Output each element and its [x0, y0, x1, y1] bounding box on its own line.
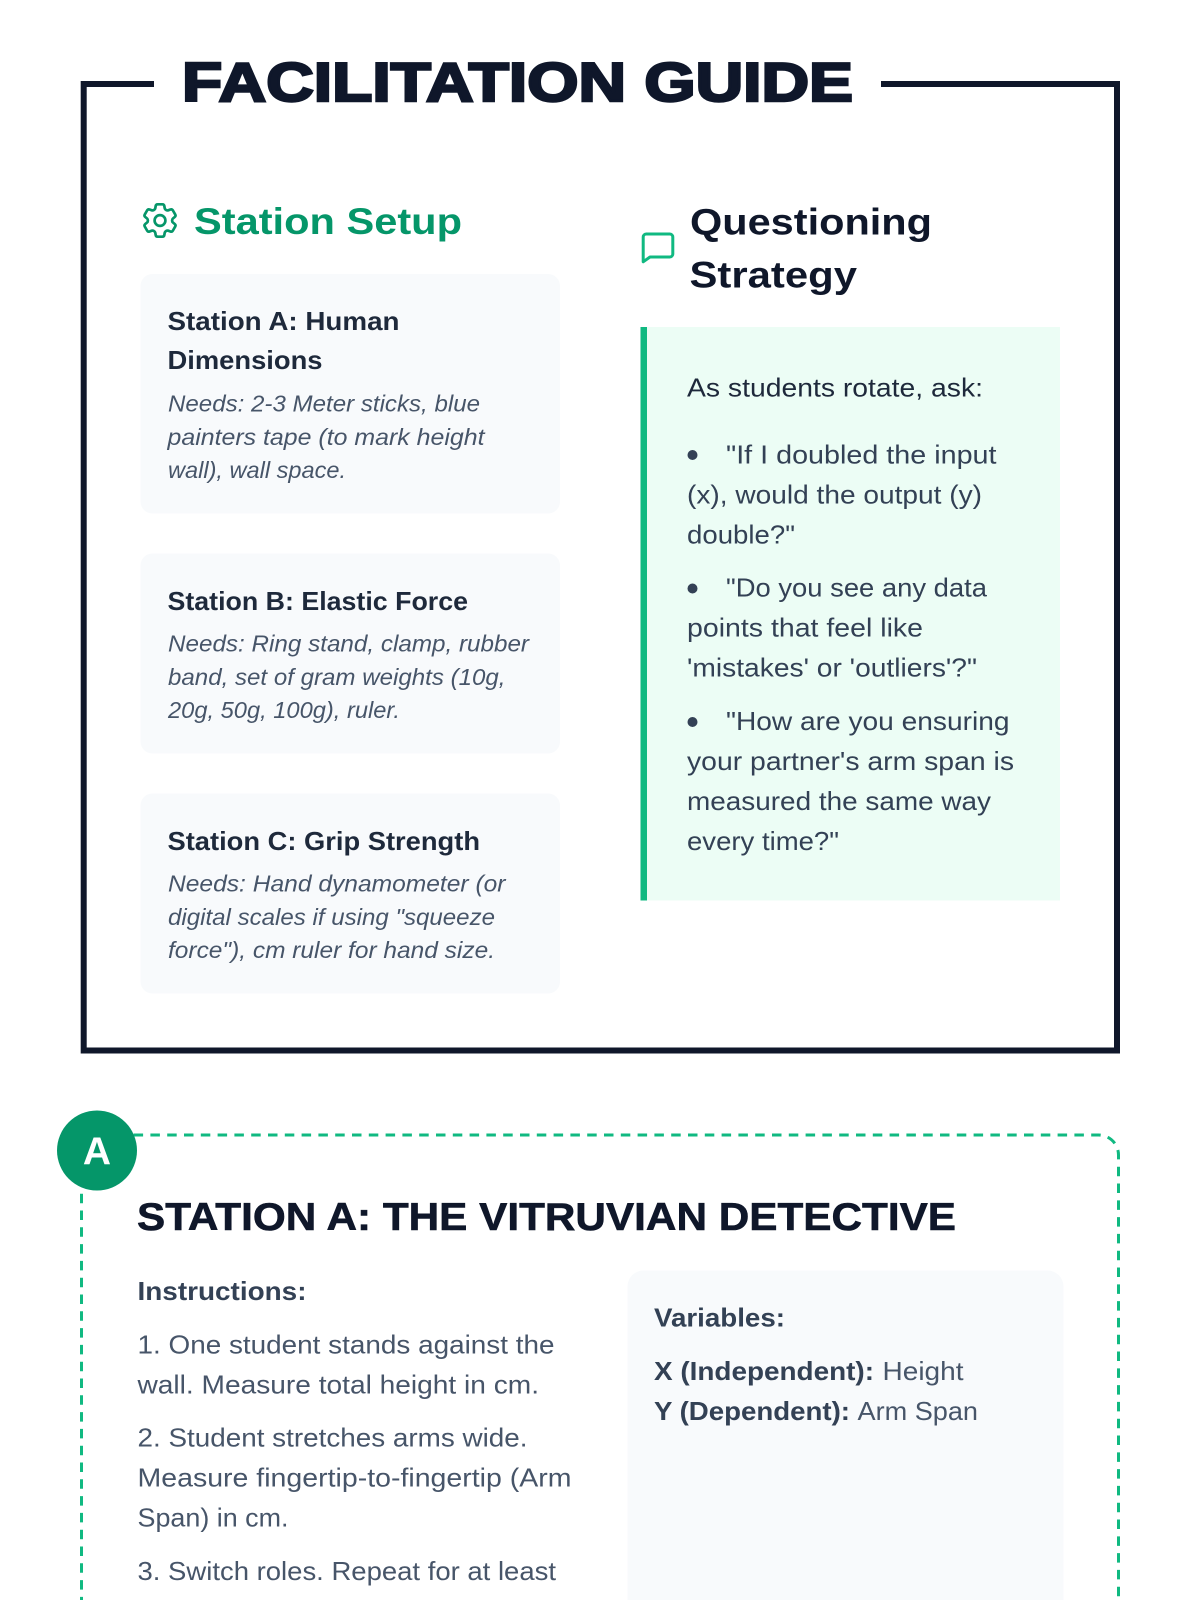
- card: station B: 20g, 50g, 100g), ruler.: [167, 697, 400, 723]
- question 2: 'mistakes' or 'outliers'?": [687, 652, 977, 682]
- card: station B: band, set of gram weights (10g,: [168, 664, 506, 690]
- card: station B: Needs: Ring stand, clamp, rubber: [168, 630, 530, 656]
- question 3: "How are you ensuring: [726, 706, 1010, 736]
- card: station A: painters tape (to mark height: [166, 424, 486, 450]
- question 1: double?": [687, 520, 795, 550]
- column: station setup: [140, 201, 560, 994]
- question 3: every time?": [687, 826, 839, 856]
- instructions: Span) in cm.: [138, 1502, 288, 1532]
- panel: station A vitruvian detective: [57, 1110, 1118, 1600]
- panel: facilitation guide: [84, 51, 1117, 1050]
- card: station B: [140, 554, 560, 754]
- card: station A: wall), wall space.: [168, 457, 346, 483]
- panel: variables: Variables:: [654, 1302, 785, 1332]
- question 3: your partner's arm span is: [687, 746, 1014, 776]
- dashed panel border: [82, 1135, 1118, 1600]
- instructions: 3. Switch roles. Repeat for at least: [138, 1556, 557, 1586]
- icon: gear: [145, 204, 175, 237]
- badge A: A: [83, 1130, 111, 1174]
- panel: variables: Arm Span: [858, 1396, 978, 1426]
- instructions: [136, 1276, 571, 1586]
- card: station A: [140, 274, 560, 514]
- card: station C: [140, 794, 560, 994]
- badge A: [57, 1110, 137, 1190]
- instructions: 1. One student stands against the: [138, 1330, 554, 1360]
- callout: questions: [640, 327, 1060, 900]
- question 1: "If I doubled the input: [726, 440, 997, 470]
- heading: questioning strategy: [690, 202, 932, 296]
- question 1: (x), would the output (y): [687, 480, 982, 510]
- card: station A: Dimensions: [168, 345, 322, 375]
- column: questioning strategy: [640, 202, 1060, 900]
- question 2: [687, 572, 988, 682]
- question 1: [687, 440, 997, 550]
- callout: questions: As students rotate, ask:: [687, 372, 983, 402]
- card: station A: Station A: Human: [168, 306, 400, 336]
- icon: speech bubble: [643, 234, 673, 262]
- panel: variables: [628, 1270, 1064, 1600]
- question 2: points that feel like: [687, 612, 923, 642]
- instructions: Instructions:: [138, 1276, 306, 1306]
- panel frame: [84, 84, 1117, 1050]
- panel: variables: X (Independent):: [654, 1356, 874, 1386]
- question 2: "Do you see any data: [726, 572, 988, 602]
- heading: questioning strategy: Questioning: [690, 202, 932, 242]
- instructions: Measure fingertip-to-fingertip (Arm: [138, 1462, 572, 1492]
- card: station C: digital scales if using "squeeze: [168, 904, 495, 930]
- panel: variables: Y (Dependent):: [654, 1396, 850, 1426]
- panel: variables: Height: [882, 1356, 964, 1386]
- card: station C: force"), cm ruler for hand size.: [168, 937, 495, 963]
- question 3: [687, 706, 1014, 856]
- heading: questioning strategy: Strategy: [690, 254, 857, 296]
- card: station C: Station C: Grip Strength: [168, 826, 480, 856]
- instructions: wall. Measure total height in cm.: [136, 1370, 539, 1400]
- card: station B: Station B: Elastic Force: [168, 586, 468, 616]
- card: station C: Needs: Hand dynamometer (or: [168, 870, 507, 896]
- title: FACILITATION GUIDE: [182, 51, 853, 113]
- heading: station setup: Station Setup: [194, 201, 462, 242]
- card: station A: Needs: 2-3 Meter sticks, blue: [168, 390, 480, 416]
- heading: station A: STATION A: THE VITRUVIAN DETECTIVE: [137, 1196, 956, 1239]
- instructions: 2. Student stretches arms wide.: [138, 1422, 528, 1452]
- question 3: measured the same way: [687, 786, 991, 816]
